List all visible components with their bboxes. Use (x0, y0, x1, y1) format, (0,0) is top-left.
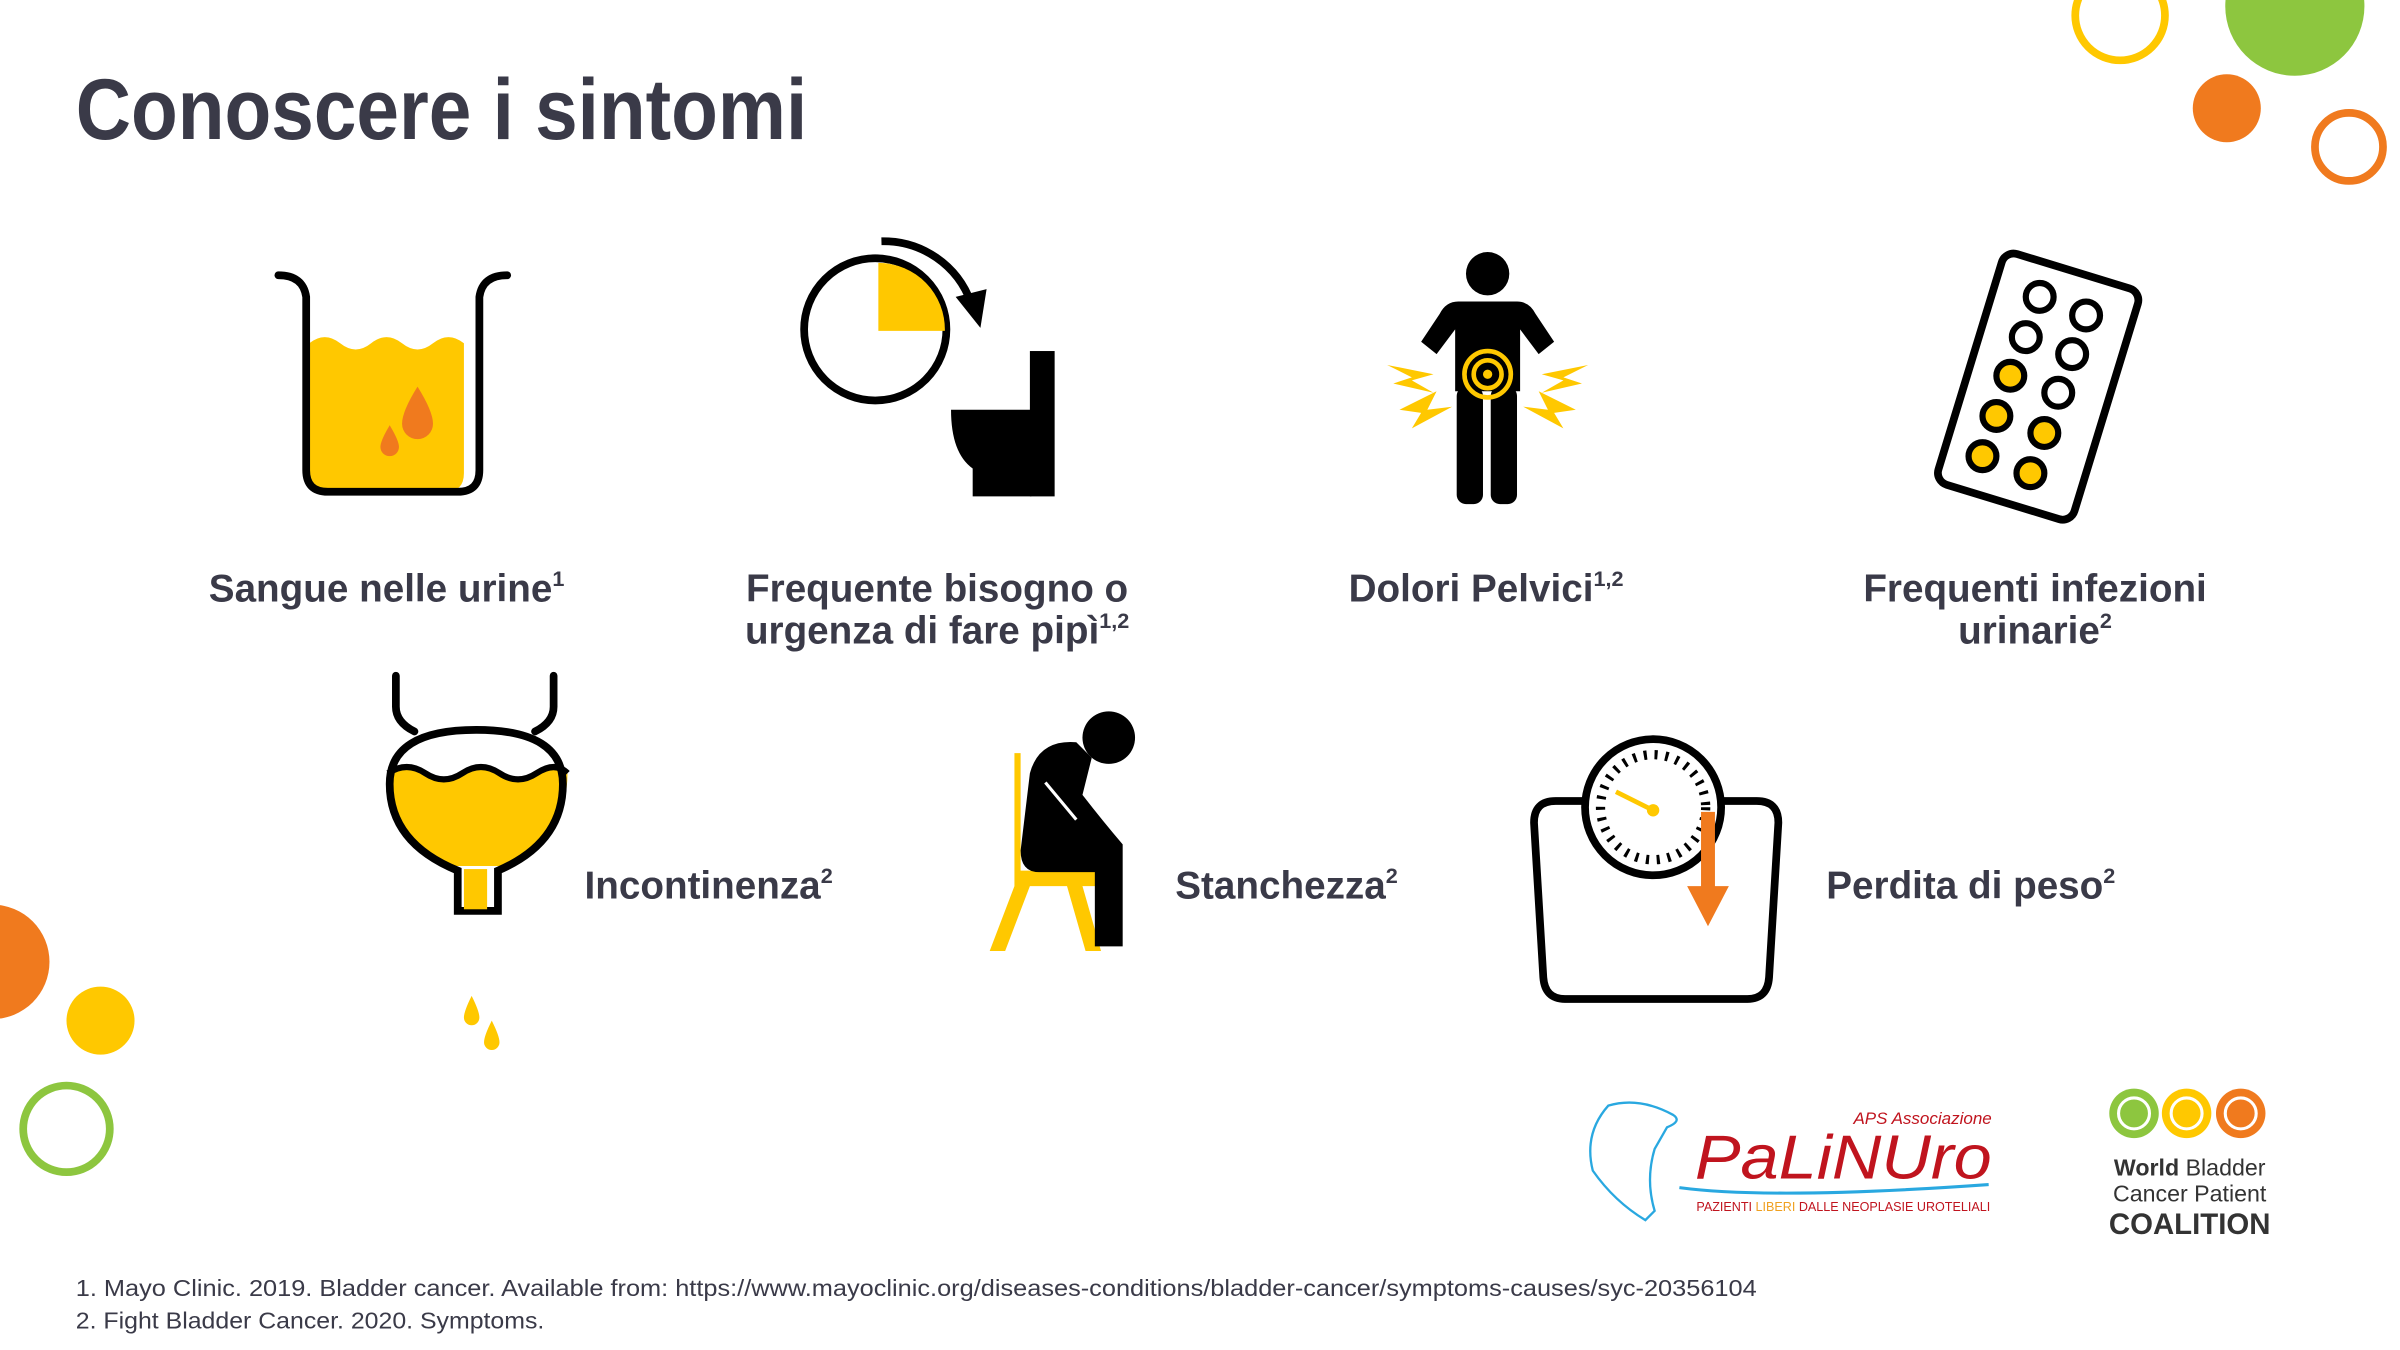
references (76, 1275, 1757, 1333)
references: 1. Mayo Clinic. 2019. Bladder cancer. Available from: https://www.mayoclinic.org/diseases-conditions/bladder-cancer/symptoms-causes/syc-20356104 (76, 1275, 1757, 1301)
title: Conoscere i sintomi (76, 62, 807, 158)
symptom: urinary infections: 2 (2100, 608, 2112, 633)
label: 2 (2103, 863, 2115, 888)
logo: PaLiNUro: PAZIENTI LIBERI DALLE NEOPLASIE UROTELIALI (1696, 1199, 1990, 1214)
symptom: weight loss (1534, 739, 2115, 999)
symptom: frequent urge: 1,2 (1099, 608, 1129, 633)
symptom: frequent urge: urgenza di fare pipì (745, 609, 1099, 652)
label: Dolori Pelvici (1349, 568, 1593, 611)
label: 1 (552, 566, 564, 591)
logo: PaLiNUro: PaLiNUro (1695, 1123, 1992, 1192)
icon: person with pelvic pain (1387, 252, 1588, 504)
decorative circles bottom left (0, 905, 135, 1172)
symptom: pelvic pain (1349, 252, 1624, 611)
logo: World Bladder Cancer Patient Coalition: World Bladder (2114, 1154, 2266, 1180)
logo: PaLiNUro: APS Associazione (1852, 1109, 1992, 1128)
label: Stanchezza (1175, 864, 1386, 907)
icon: clock and toilet (804, 241, 1055, 496)
label: Perdita di peso (1826, 864, 2103, 907)
icon: scale with arrow (1534, 739, 1778, 999)
icon: pill blister (1935, 250, 2141, 523)
logo: World Bladder Cancer Patient Coalition: COALITION (2109, 1208, 2270, 1241)
icon: beaker (278, 275, 507, 492)
symptom: fatigue (990, 711, 1398, 951)
symptom: blood in urine (209, 275, 564, 611)
label: Frequente bisogno o (746, 568, 1128, 611)
label: Sangue nelle urine (209, 568, 552, 611)
label: Frequenti infezioni (1863, 568, 2207, 611)
symptom: incontinence (388, 676, 833, 1050)
symptom: frequent urge (745, 241, 1129, 652)
references: 2. Fight Bladder Cancer. 2020. Symptoms. (76, 1307, 544, 1333)
logo: World Bladder Cancer Patient Coalition (2109, 1089, 2270, 1241)
label: 1,2 (1593, 566, 1624, 591)
label: 2 (1386, 863, 1398, 888)
decorative circles top right (2075, 0, 2383, 181)
symptom: urinary infections (1863, 250, 2207, 652)
icon: tired person on chair (990, 711, 1135, 951)
logo: World Bladder Cancer Patient Coalition: Cancer Patient (2113, 1181, 2267, 1207)
label: 2 (821, 863, 833, 888)
logo: PaLiNUro (1590, 1103, 1992, 1220)
symptom: urinary infections: urinarie (1958, 609, 2100, 652)
label: Incontinenza (585, 864, 821, 907)
icon: bladder with drops (388, 676, 568, 1050)
